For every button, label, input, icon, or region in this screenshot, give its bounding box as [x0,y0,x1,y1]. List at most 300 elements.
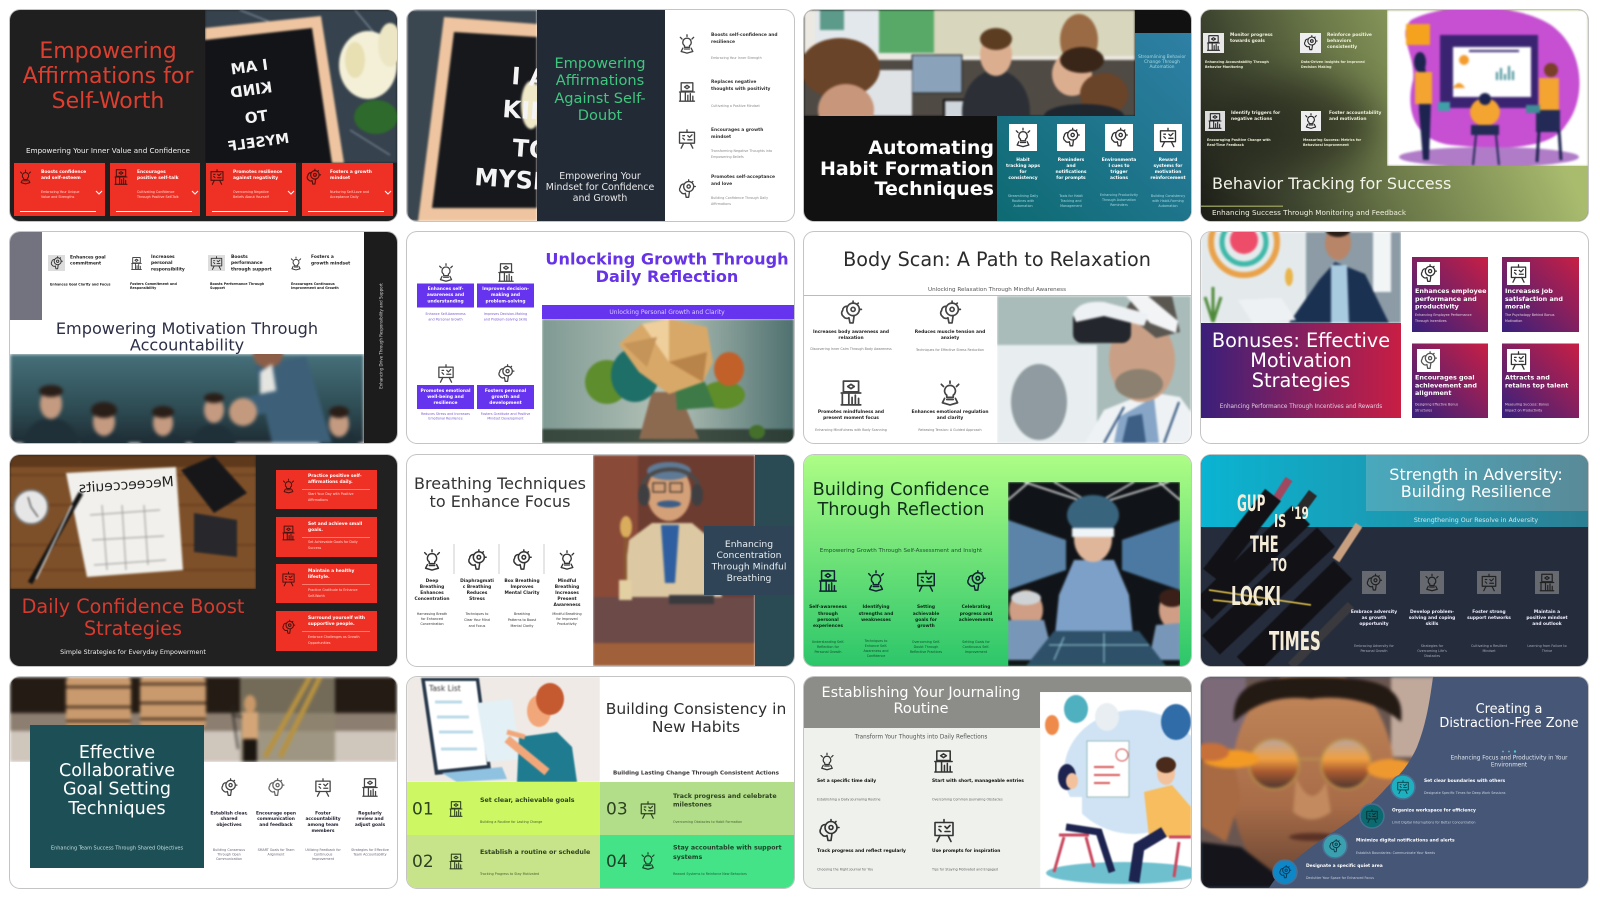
item: problem solving: Obstacles [1424,654,1440,658]
item: clear boundaries: Designate Specific Times for Deep Work Sessions [1424,791,1506,795]
item: shared objectives: Building Consensus [213,848,245,852]
card: personal growth: Fosters personal [485,388,527,394]
item: organize workspace: Limit Digital Interruptions for Better Concentration [1392,820,1475,824]
purple band with subtitle [542,305,794,319]
card: top talent [1502,344,1579,418]
card: top talent: Attracts and [1505,374,1550,382]
card: job satisfaction: The Psychology Behind Bonus [1504,313,1555,317]
item: quiet area: Declutter Your Space for Enhanced Focus [1306,876,1374,880]
item: strengths: Awareness and [864,649,888,653]
item: tracking apps: tracking apps [1006,163,1040,169]
item: specific time: Establishing a Daily Journaling Routine [817,798,881,802]
item: foster accountability: Behavioral Improvement [1303,143,1349,147]
item: tracking apps: Routines with [1012,199,1034,203]
item: track progress: Choosing the Right Journal for You [817,868,873,872]
item: achievable goals: Overcoming Self- [912,640,941,644]
item: self-acceptance: Building Confidence Through Daily [711,196,768,200]
item: performance support [208,254,272,290]
item: review goals: review and [356,816,384,822]
card: small goals: goals. [308,527,323,533]
card: positive self-talk: Cultivating Confidence [137,190,174,194]
title: Techniques [875,178,994,200]
item: goal commitment: commitment [70,260,101,266]
panel: Automating Habit Formation Techniques [804,10,1191,221]
item: identify triggers: Real-Time Feedback [1207,143,1245,147]
item: embrace adversity: opportunity [1359,621,1389,627]
item: monitor progress: Monitor progress [1230,32,1273,38]
item: open communication: Encourage open [256,810,296,816]
item: tracking apps: consistency [1008,175,1038,181]
item: foster accountability: and motivation [1329,116,1367,122]
photo: letter board: KIN [502,95,551,126]
item: open communication: SMART Goals for Team [258,848,294,852]
subtitle: Enhancing Focus and Productivity in Your [1451,756,1568,762]
step 02 [407,835,600,888]
card: supportive people: Opportunities [308,641,331,645]
tagline: Change Through [1144,59,1180,65]
item: self-awareness: Self-awareness [809,604,847,610]
panel: Unlocking Growth Through Daily Reflection [407,232,794,443]
panel: Empowering Affirmations for Self-Worth [10,10,397,221]
item: quiet area: Designate a specific quiet area [1306,863,1383,869]
item: strengths: Enhance Self- [865,644,888,648]
card: decision-making: and Problem-Solving Skills [484,318,528,322]
item: monitor progress: towards goals [1230,38,1265,44]
item: mindfulness: present moment focus [823,415,879,421]
subtitle: Strengthening Our Resolve in Adversity [1414,517,1538,524]
item: environmental cues: Environmenta [1102,157,1136,163]
item: support networks [1467,571,1511,653]
card: employee performance [1412,257,1488,332]
photo: desk with paper and clock: Meceecceuits [78,474,174,497]
card: healthy lifestyle: lifestyle. [308,574,330,580]
card: small goals: Set and achieve small [308,521,363,527]
panel: Body Scan: A Path to Relaxation [804,232,1191,443]
artwork: slashed hand with lettering: '19 [1291,505,1309,524]
item: shared objectives: Communication [216,857,242,861]
title: Against Self- [554,90,646,107]
item: foster accountability [1301,110,1381,147]
card: decision-making: making and [491,292,520,298]
subtitle: Empowering Growth Through Self-Assessment and Insight [820,548,983,554]
artwork: slashed hand with lettering: TO [1271,556,1287,576]
card: personal growth: development [489,400,522,406]
illustration: team at screen [1387,10,1588,166]
step 01 [407,782,600,835]
title block [30,725,204,868]
subtitle: Environment [1491,762,1528,768]
item: strengths: strengths and [859,611,893,617]
card: positive self-talk [110,163,200,216]
artwork: slashed hand with lettering [1203,479,1359,666]
card: job satisfaction: Increases job [1505,287,1553,295]
card: personal growth: Mindset Development [487,416,524,420]
title block: Collaborative [59,761,175,781]
item: review goals: Regularly [358,810,382,816]
item: diaphragmatic breathing [460,550,494,628]
item: achievable goals: Doubt Through [914,645,938,649]
item: performance support: Boosts [231,254,248,260]
card: positive affirmations: Start Your Day with Positive [308,492,354,496]
item: self-awareness: through [818,611,838,617]
item: reminders: Management [1060,204,1083,208]
card: small goals: Set Achievable Goals for Daily [308,540,358,544]
step 02: Establish a routine or schedule [480,849,590,856]
card: decision-making: Improves Decision-Making [484,312,527,316]
step 02: Tracking Progress to Stay Motivated [479,872,539,876]
item: clear boundaries: Set clear boundaries with others [1424,778,1506,784]
card: positive affirmations: affirmations daily. [308,479,353,485]
item: diaphragmatic breathing: Stress [469,596,485,602]
card: small goals [276,517,377,557]
item: personal responsibility: Responsibility [130,286,157,290]
item: short entries: Overcoming Common Journaling Obstacles [932,798,1003,802]
panel: Building Consistency in New Habits [407,677,794,888]
item: personal responsibility: responsibility [151,266,185,272]
item: growth mindset: Fosters a [311,254,334,260]
title: New Habits [652,718,740,736]
item: growth mindset [291,254,350,290]
card: employee performance: productivity [1415,302,1460,310]
item: positive mindset: Learning from Failure to [1527,644,1567,648]
item: self-acceptance [680,174,775,206]
card: positive affirmations: Affirmations [308,498,328,502]
card: employee performance: Enhancing Employee Performance [1415,313,1472,317]
item: emotional regulation: and clarity [937,415,963,421]
item: support networks: Mindset [1483,649,1496,653]
card: supportive people: supportive people. [308,621,355,627]
item: mindful breathing: Present [557,596,577,602]
accent line [1201,206,1283,207]
image: cartoon man with headphones [593,455,755,666]
item: deep breathing: Harnessing Breath [417,612,447,616]
item: self-acceptance: Affirmations [711,202,731,206]
callout: enhancing concentration [704,526,794,595]
item: growth mindset: growth mindset [311,260,350,266]
photo: letter board with rose: KIND [229,78,273,102]
title: Automating [868,137,994,159]
item: growth mindset: Empowering Beliefs [711,155,744,159]
title block: Goal Setting [63,780,171,800]
item: performance support: Support [210,286,225,290]
item: mindful breathing: for Improved [556,617,578,621]
item: reward systems: reinforcement [1150,175,1186,181]
panel: Empowering Motivation Through Accountability [10,232,397,443]
title: Distraction-Free Zone [1439,716,1579,731]
panel: Daily Confidence Boost Strategies [10,455,397,666]
item: reward systems: Building Consistency [1151,194,1185,198]
item: diaphragmatic breathing: c Breathing [463,584,491,590]
title: Creating a [1476,702,1542,717]
subtitle: Empowering Your Inner Value and Confidence [26,146,191,155]
card: emotional well-being: resilience [434,400,457,406]
item: performance support: through support [231,266,272,272]
item: monitor progress: Behavior Monitoring [1205,65,1244,69]
item: achievable goals: growth [917,623,935,629]
item: tracking apps: Streamlining Daily [1008,194,1038,198]
item: foster accountability: Measuring Success: Metrics for [1303,138,1362,142]
title panel: Building Resilience [1401,482,1551,501]
subtitle: Transform Your Thoughts into Daily Reflections [854,734,987,740]
card: job satisfaction: Motivation [1505,319,1522,323]
step 01: Building a Routine for Lasting Change [480,820,542,824]
item: problem solving: solving and coping [1409,615,1455,621]
item: problem solving [1409,571,1455,658]
card: self-awareness: and Personal Growth [428,318,463,322]
card: decision-making [477,264,534,322]
item: deep breathing: Concentration [414,596,450,602]
item: self-awareness [809,571,847,654]
title: Empowering [554,55,646,72]
item: tracking apps: for [1019,169,1027,175]
card: positive self-talk: Through Positive Self-Talk [136,195,179,199]
card: resilience: against negativity [233,175,278,181]
item: achievable goals [910,571,942,654]
item: open communication [256,779,296,856]
item: self-awareness: Personal Growth [814,650,842,654]
item: reinforce positive behaviors: behaviors [1327,38,1352,44]
item: reminders: notifications [1056,169,1087,175]
item: accountability: accountability [305,816,341,822]
photo: man pointing [10,354,364,443]
item: reward systems: systems for [1154,163,1183,169]
photo: letter board with rose: TO [244,107,269,128]
item: replaces negative thoughts: thoughts with positivity [711,86,771,92]
title: Breathing Techniques [414,474,586,493]
title block: Motivation [1250,349,1352,372]
item: deep breathing: Breathing [420,584,444,590]
item: environmental cues: l cues to [1108,163,1130,169]
panel: Behavior Tracking for Success [1201,10,1588,221]
panel: Building Confidence Through Reflection [804,455,1191,666]
title block: Enhancing Team Success Through Shared Objectives [51,846,183,852]
item: foster accountability: Foster accountability [1329,110,1381,116]
item: achievable goals: goals for [915,617,938,623]
card: decision-making: problem-solving [485,298,526,304]
card: job satisfaction [1502,257,1579,332]
item: personal responsibility: personal [151,260,173,266]
item: deep breathing: for Enhanced [421,617,443,621]
title: Habit Formation [820,158,994,180]
item: box breathing [504,550,540,628]
item: growth mindset [680,127,772,159]
card: small goals: Success [308,546,322,550]
item: muscle tension: anxiety [941,335,959,341]
item: identify triggers [1205,110,1281,147]
card: supportive people [276,611,377,651]
item: environmental cues: trigger [1110,169,1128,175]
card: boosts confidence: Boosts confidence [41,169,86,175]
item: short entries [932,751,1024,802]
item: personal responsibility: Fosters Commitment and [130,282,177,286]
item: problem solving: Develop problem- [1410,609,1454,615]
title: Strategies [84,617,182,640]
cyan header [1201,455,1588,527]
item: strengths [859,571,893,658]
title: Through Reflection [816,500,984,520]
step 04: systems [673,854,702,861]
panel: Breathing Techniques to Enhance Focus [407,455,794,666]
item: positive mindset: Thrive [1541,649,1552,653]
item: diaphragmatic breathing: Techniques to [465,612,488,616]
illustration: man at task list [407,677,600,782]
item: review goals: adjust goals [355,822,385,828]
side strip with vertical tagline [364,232,397,443]
photo: team at monitors [804,10,1135,116]
item: mindful breathing: Breathing [555,584,579,590]
title block: Enhancing Performance Through Incentives and Rewards [1220,404,1382,410]
item: diaphragmatic breathing: Clear Your Mind [464,618,490,622]
card: goal achievement [1412,344,1488,418]
item: strengths: Confidence [867,654,885,658]
grey header with title: Routine [894,701,949,717]
item: self-acceptance: Promotes self-acceptance [711,174,775,180]
item: monitor progress [1203,32,1273,69]
item: identify triggers: Identify triggers for [1231,110,1281,116]
item: reinforce positive behaviors [1300,32,1372,69]
item: boosts self-confidence: resilience [711,39,735,45]
card: growth mindset [302,163,393,216]
item: reward systems: motivation [1155,169,1181,175]
card: goal achievement: alignment [1415,389,1451,397]
card: goal achievement: achievement and [1415,382,1477,390]
subtitle: Mindset for Confidence [546,182,654,193]
photo: businessman with tablet [1201,232,1401,323]
card: employee performance: Enhances employee [1415,287,1487,295]
panel: Empowering Affirmations Against Self-Doubt [407,10,794,221]
photo: letter board with rose [205,10,397,163]
card: emotional well-being: Emotional Resilience [428,416,463,420]
gradient background [804,455,1191,666]
photo: doctor with VR headset [997,296,1191,443]
card: personal growth: growth and [491,394,520,400]
subtitle: Simple Strategies for Everyday Empowerment [60,649,206,656]
title block: Bonuses: Effective [1212,329,1390,352]
item: reinforce positive behaviors: Reinforce positive [1327,32,1372,38]
title: Building Consistency in [606,700,786,718]
step 03: Overcoming Obstacles to Habit Formation [673,820,742,824]
item: box breathing: Box Breathing [504,578,540,584]
step 04: 04 [606,852,628,872]
item: boosts self-confidence: Boosts self-confidence and [711,32,778,38]
dark title panel [537,10,665,221]
item: support networks: Foster strong [1472,609,1506,615]
card: decision-making: Improves decision- [482,286,529,292]
item: reward systems: Reward [1159,157,1177,163]
item: personal responsibility: Increases [151,254,175,260]
item: celebrating progress [959,571,994,654]
card: healthy lifestyle: Practice Gratitude to Enhance [308,588,357,592]
card: personal growth: Fosters Gratitude and Positive [481,412,530,416]
card: resilience [206,163,296,216]
item: deep breathing [414,550,450,626]
item: mindfulness: Promotes mindfulness and [818,409,884,415]
item: accountability: Continuous [314,852,333,856]
item: embrace adversity: as growth [1362,615,1386,621]
item: emotional regulation: Enhances emotional regulation [912,409,988,415]
grey header with title [804,677,1191,728]
title: Body Scan: A Path to Relaxation [843,248,1151,271]
item: environmental cues [1100,124,1138,207]
card: job satisfaction: morale [1505,302,1531,310]
item: open communication: communication [257,816,295,822]
item: open communication: Alignment [268,852,285,856]
photo: wooden pegs and figurine [10,677,397,762]
card: emotional well-being: well-being and [427,394,464,400]
item: strengths: weaknesses [861,617,891,623]
item: shared objectives: objectives [216,822,242,828]
item: diaphragmatic breathing: Reduces [467,590,488,596]
card: growth mindset: Nurturing Self-Love and [330,190,369,194]
title: Daily Reflection [596,267,738,286]
item: mindful breathing: Productivity [557,622,577,626]
item: box breathing: Patterns to Boost [508,618,537,622]
item: muscle tension [915,301,985,352]
item: prompts [931,820,1000,872]
item: growth mindset: Improvement and Growth [291,286,339,290]
artwork: slashed hand with lettering: THE [1250,533,1279,558]
step 04: Reward Systems to Reinforce New Behaviors [673,872,747,876]
item: growth mindset: mindset [711,134,731,140]
item: positive mindset: positive mindset [1526,615,1568,621]
item: short entries: Start with short, manageable entries [932,778,1024,784]
item: support networks: support networks [1467,615,1511,621]
item: muscle tension: Reduces muscle tension and [915,329,985,335]
item: mindfulness: Enhancing Mindfulness with Body Scanning [815,428,887,432]
artwork: slashed hand with lettering: IS [1274,511,1286,532]
item: celebrating progress: achievements [959,617,994,623]
item: boosts self-confidence [680,32,778,60]
panel: Creating a Distraction-Free Zone [1201,677,1588,888]
item: organize workspace [1360,804,1476,828]
item: box breathing: Improves [510,584,534,590]
card: resilience: Beliefs About Yourself [233,195,270,199]
item: prompts: Use prompts for inspiration [932,848,1000,854]
panel: Establishing Your Journaling Routine [804,677,1191,888]
item: reward systems [1150,124,1186,208]
item: personal responsibility [130,254,185,290]
item: embrace adversity [1351,571,1397,653]
item: open communication: and feedback [259,822,293,828]
card: positive self-talk: positive self-talk [137,175,179,181]
card: emotional well-being: Reduces Stress and Increases [421,412,470,416]
subtitle: and Growth [573,193,627,204]
item: reminders: Tracking and [1060,199,1081,203]
tagline: Automation [1149,64,1175,70]
grey header with title: Establishing Your Journaling [822,685,1020,701]
item: mindful breathing: Increases [555,590,579,596]
item: growth mindset: Encourages a growth [711,127,763,133]
title: to Enhance Focus [430,492,570,511]
artwork: slashed hand with lettering: LOCKI [1231,582,1281,612]
item: accountability: Foster [315,810,332,816]
item: strengths: Identifying [862,604,890,610]
item: boosts self-confidence: Embracing Your Inner Strength [711,56,762,60]
item: reinforce positive behaviors: Decision Making [1301,65,1332,69]
item: review goals: Team Accountability [352,852,387,856]
grey accent block [10,232,42,320]
photo: letter board: TO [512,134,550,165]
item: body awareness: Discovering Inner Calm Through Body Awareness [810,347,892,351]
card: resilience: Promotes resilience [233,169,282,175]
card: personal growth [477,365,534,420]
item: quiet area [1273,860,1383,884]
item: deep breathing: Deep [426,578,438,584]
item: emotional regulation: Releasing Tension: A Guided Approach [918,428,982,432]
purple band with subtitle: Unlocking Personal Growth and Clarity [609,309,725,316]
item: goal commitment: Enhances Goal Clarity and Focus [50,282,110,286]
photo: letter board with rose: MYSELF [227,131,290,155]
